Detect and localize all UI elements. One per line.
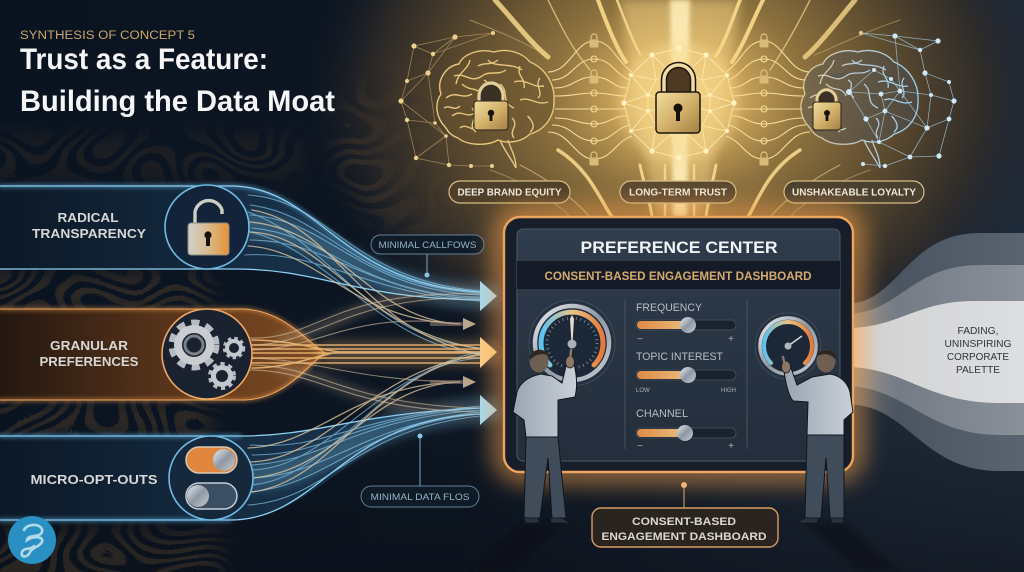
slider: channel: − <box>637 441 643 452</box>
fingerprint texture background <box>0 92 410 572</box>
person left <box>513 350 577 523</box>
label: granular preferences <box>40 338 139 369</box>
arrow: center orange <box>480 337 497 368</box>
slider: frequency: FREQUENCY <box>636 302 703 314</box>
callout: consent-based engagement dashboard <box>592 482 778 547</box>
right brain padlock <box>813 90 841 130</box>
title: Trust as a Feature: <box>20 43 268 76</box>
arrow: bottom blue <box>480 395 497 425</box>
label: granular preferences: GRANULAR <box>50 338 129 353</box>
logo badge <box>8 516 56 564</box>
fading corporate palette ribbons <box>845 233 1024 471</box>
right node network <box>846 31 957 168</box>
callout: consent-based engagement dashboard: CONSENT-BASED <box>632 516 736 528</box>
band: micro-opt-outs <box>0 408 480 520</box>
circle: toggles icon <box>169 436 253 520</box>
connecting wires with small locks <box>548 34 810 166</box>
toggle on <box>186 447 237 473</box>
medium gear bottom <box>210 364 234 388</box>
arrow: small upper tan <box>430 318 476 330</box>
soft haze along flows <box>250 225 490 478</box>
panel title: PREFERENCE CENTER <box>580 238 778 257</box>
arrow: top blue <box>480 281 497 311</box>
slider: frequency: − <box>637 334 643 345</box>
palette text: CORPORATE <box>947 352 1009 363</box>
person right <box>782 350 853 523</box>
title: Building the Data Moat <box>20 85 335 118</box>
label: radical transparency: RADICAL <box>58 210 119 225</box>
preference center panel <box>504 217 853 472</box>
palette text: UNINSPIRING <box>944 339 1012 350</box>
pill: deep brand equity: DEEP BRAND EQUITY <box>458 188 562 198</box>
golden glow and rays <box>309 0 1024 385</box>
callout: consent-based engagement dashboard: ENGAGEMENT DASHBOARD <box>602 531 767 543</box>
slider: frequency: + <box>728 334 734 345</box>
strands from top band <box>245 195 480 354</box>
label: micro-opt-outs: MICRO-OPT-OUTS <box>30 472 158 487</box>
center padlock <box>656 65 700 133</box>
right brain with lock <box>801 31 957 168</box>
pill: unshakeable loyalty <box>784 181 924 203</box>
label: radical transparency: TRANSPARENCY <box>32 226 146 241</box>
toggle off <box>186 483 237 509</box>
small gear right <box>224 338 244 358</box>
palette text: FADING, <box>958 326 998 337</box>
flow streams <box>0 186 490 520</box>
callout: minimal callfows <box>371 235 484 278</box>
pill: long-term trust <box>620 181 736 203</box>
label: radical transparency <box>32 210 146 241</box>
label: granular preferences: PREFERENCES <box>40 354 139 369</box>
title <box>20 43 335 118</box>
callout: minimal data flos: MINIMAL DATA FLOS <box>370 492 470 503</box>
slider: topic interest: HIGH <box>721 388 736 394</box>
panel subtitle: CONSENT-BASED ENGAGEMENT DASHBOARD <box>544 269 812 283</box>
slider: topic interest: LOW <box>636 388 650 394</box>
strands from bottom band <box>248 352 480 505</box>
gauge left <box>529 300 615 386</box>
arrow: small lower tan <box>430 376 476 388</box>
left node network <box>398 31 495 168</box>
circle: open padlock icon <box>165 185 249 269</box>
left brain with lock <box>398 31 554 168</box>
pill: deep brand equity <box>449 181 570 203</box>
slider: channel: CHANNEL <box>636 408 688 420</box>
eyebrow label: SYNTHESIS OF CONCEPT 5 <box>20 30 195 42</box>
callout: minimal data flos <box>361 434 479 507</box>
palette text: PALETTE <box>956 365 1000 376</box>
circle: gears icon <box>162 309 252 399</box>
strands from middle band <box>252 340 482 368</box>
callout: minimal callfows: MINIMAL CALLFOWS <box>378 240 476 251</box>
slider: channel: + <box>728 441 734 452</box>
pill: long-term trust: LONG-TERM TRUST <box>629 188 727 198</box>
slider: channel <box>636 408 736 452</box>
center globe with lock <box>619 43 739 163</box>
pill: unshakeable loyalty: UNSHAKEABLE LOYALTY <box>792 188 916 198</box>
large gear <box>172 323 216 367</box>
left brain padlock <box>474 83 508 130</box>
gauge right <box>755 313 821 379</box>
slider: topic interest <box>636 351 736 394</box>
band: granular preferences <box>0 309 325 400</box>
band: radical transparency <box>0 186 480 300</box>
slider: frequency <box>636 302 736 345</box>
slider: topic interest: TOPIC INTEREST <box>636 351 723 363</box>
floor shadows <box>470 522 900 572</box>
palette text <box>944 326 1012 376</box>
